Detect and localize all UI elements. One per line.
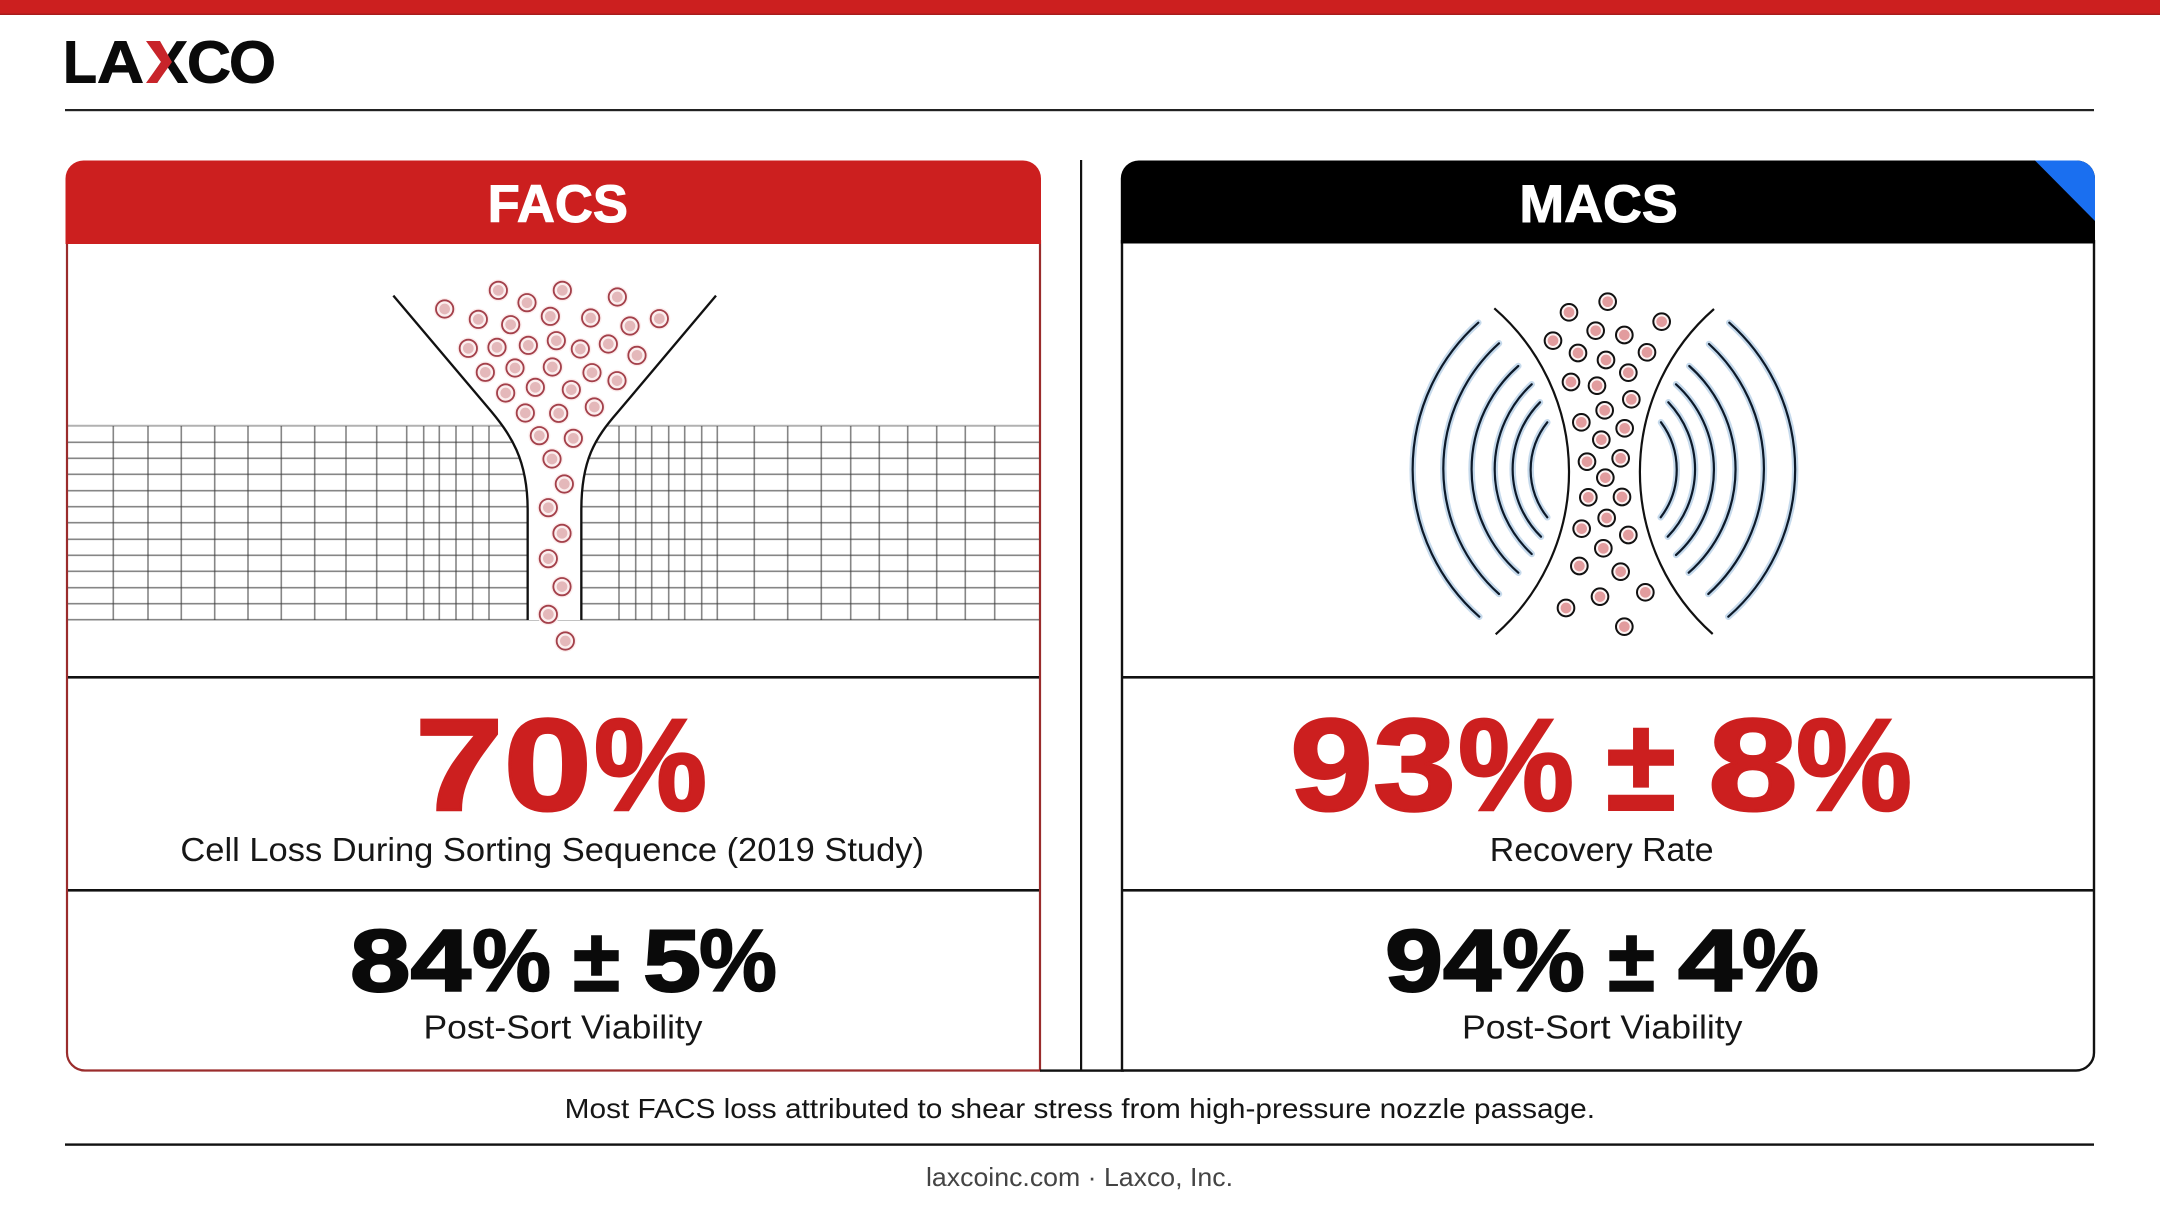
stat: 94% viability: % bbox=[1742, 911, 1819, 1010]
FACS cells bbox=[434, 279, 670, 652]
field arcs glow bbox=[1413, 323, 1795, 617]
stat: 93% recovery: 8 bbox=[1708, 691, 1798, 838]
stat: 84% viability: 84 bbox=[350, 911, 471, 1010]
FACS panel frame bbox=[67, 240, 1040, 1070]
panel: MACS bbox=[1121, 160, 2095, 1070]
MACS header band bbox=[1121, 160, 2095, 244]
field arcs bbox=[1413, 323, 1795, 617]
footnote: Most FACS loss attributed to shear stress from high-pressure nozzle passage. bbox=[565, 1093, 1595, 1124]
stat: 70% cell loss bbox=[180, 691, 924, 868]
footer text: laxcoinc.com · Laxco, Inc. bbox=[926, 1162, 1233, 1192]
stat: 70% cell loss: Cell Loss During Sorting Sequence (2019 Study) bbox=[180, 831, 924, 868]
FACS header band: FACS bbox=[488, 175, 628, 234]
MACS cells bbox=[1543, 292, 1672, 637]
logo: LAXCO: L bbox=[63, 30, 97, 96]
logo: LAXCO: A bbox=[97, 30, 144, 96]
header rule bbox=[65, 109, 2094, 111]
logo: LAXCO bbox=[63, 30, 276, 96]
stat: 94% viability: Post-Sort Viability bbox=[1462, 1008, 1743, 1046]
stat: 93% recovery: % bbox=[1458, 691, 1574, 838]
stat: 94% viability: ± bbox=[1608, 911, 1655, 1010]
stat: 84% viability: % bbox=[699, 911, 777, 1010]
mesh grid bbox=[68, 426, 1039, 620]
stat: 70% cell loss: 70 bbox=[415, 691, 592, 838]
stat: 94% viability: % bbox=[1502, 911, 1585, 1010]
center divider bbox=[1040, 160, 1124, 1072]
panel: FACS bbox=[66, 160, 1041, 1070]
stat: 94% viability: 94 bbox=[1385, 911, 1501, 1010]
stat: 93% recovery: Recovery Rate bbox=[1490, 831, 1714, 868]
stat: 84% viability: Post-Sort Viability bbox=[424, 1008, 703, 1046]
stat: 84% viability: ± bbox=[573, 911, 620, 1010]
footer rule bbox=[65, 1143, 2094, 1146]
MACS panel frame bbox=[1122, 240, 2094, 1070]
stat: 84% viability: 5 bbox=[643, 911, 701, 1010]
logo: LAXCO: O bbox=[229, 30, 276, 96]
stat: 94% viability bbox=[1385, 911, 1819, 1046]
stat: 93% recovery: ± bbox=[1606, 691, 1676, 838]
stat: 93% recovery bbox=[1290, 691, 1912, 868]
logo: LAXCO: X bbox=[147, 30, 188, 96]
stat: 84% viability bbox=[350, 911, 777, 1046]
stat: 93% recovery: % bbox=[1796, 691, 1912, 838]
MACS header band: MACS bbox=[1519, 175, 1678, 234]
MACS dividers bbox=[1122, 676, 2094, 892]
stat: 70% cell loss: % bbox=[594, 691, 707, 838]
stat: 93% recovery: 93 bbox=[1290, 691, 1456, 838]
top red bar bbox=[0, 0, 2160, 15]
stat: 84% viability: % bbox=[472, 911, 551, 1010]
nozzle funnel bbox=[393, 296, 716, 620]
logo: LAXCO: C bbox=[187, 30, 231, 96]
diagram: cells between magnetic field arcs bbox=[1413, 292, 1795, 637]
FACS header band bbox=[66, 160, 1041, 244]
blue corner accent bbox=[2035, 160, 2095, 221]
stat: 94% viability: 4 bbox=[1678, 911, 1742, 1010]
channel walls bbox=[1494, 308, 1714, 634]
FACS dividers bbox=[68, 676, 1039, 892]
diagram: cells funnelled through nozzle over grid bbox=[68, 279, 1039, 652]
